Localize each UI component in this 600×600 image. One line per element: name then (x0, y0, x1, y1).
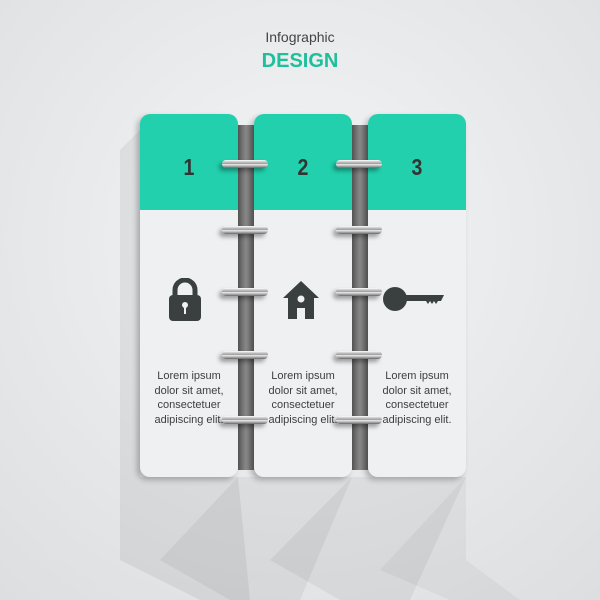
panel: card 1: 1 (184, 154, 194, 180)
panel: card 2: Lorem ipsum (271, 370, 335, 382)
panel: card 3: adipiscing elit. (382, 414, 452, 426)
panel: card 3: dolor sit amet, (382, 384, 452, 396)
panel: card 2: dolor sit amet, (268, 384, 338, 396)
panel: card 1: consectetuer (158, 399, 220, 411)
panel: card 1: adipiscing elit. (154, 414, 224, 426)
icon: key (383, 287, 444, 311)
panel: card 3: 3 (412, 154, 422, 180)
subtitle DESIGN: DESIGN (262, 50, 338, 72)
panel: card 1 (140, 114, 238, 477)
rods (238, 125, 254, 470)
panel: card 1: dolor sit amet, (154, 384, 224, 396)
panel: card 2: 2 (298, 154, 308, 180)
panel: card 2: adipiscing elit. (268, 414, 338, 426)
panel: card 3: Lorem ipsum (385, 370, 449, 382)
panel: card 3: consectetuer (386, 399, 448, 411)
icon: house (283, 281, 319, 319)
panel: card 3 (368, 114, 466, 477)
panel: card 2 (254, 114, 352, 477)
icon: lock (169, 278, 201, 321)
panel: card 2: consectetuer (272, 399, 334, 411)
title: Infographic (265, 29, 335, 45)
panel: card 1: Lorem ipsum (157, 370, 221, 382)
